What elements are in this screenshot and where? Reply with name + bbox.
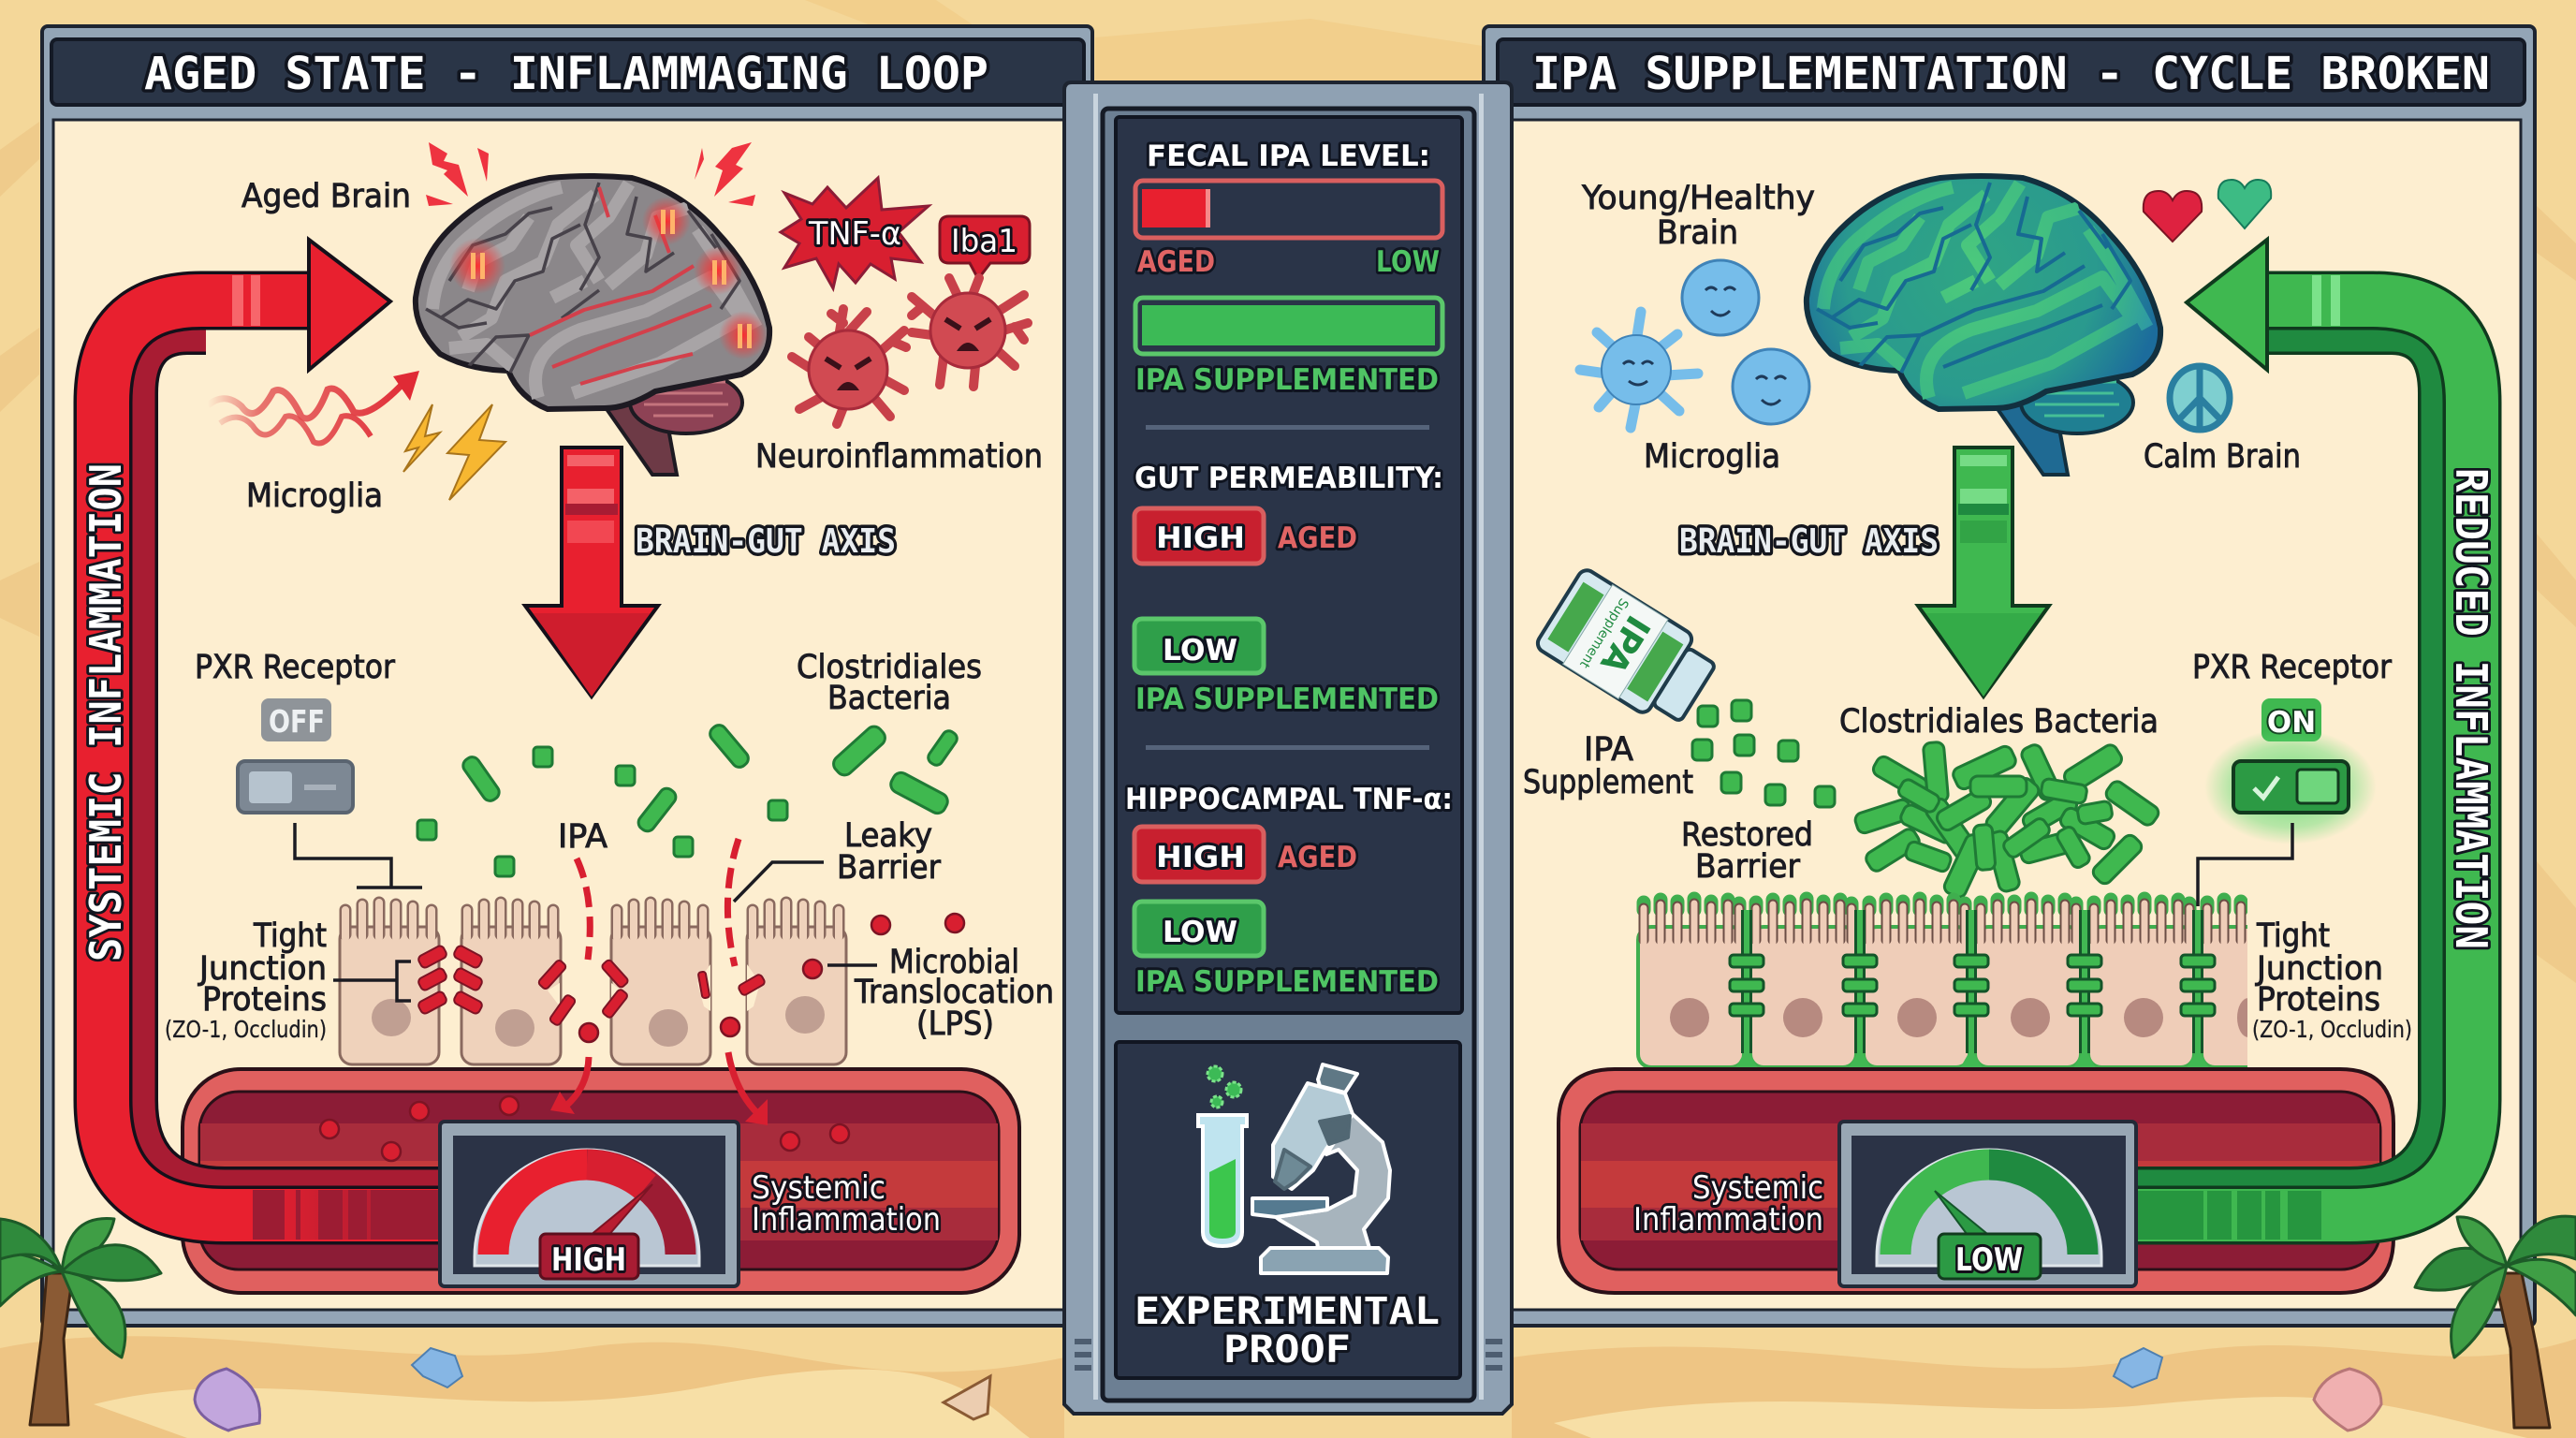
icon: IPA supplement bottle: Supplement	[1576, 595, 1632, 671]
label: experimental proof: EXPERIMENTAL	[1134, 1290, 1440, 1333]
green bacteria and IPA molecules	[417, 722, 959, 876]
systemic inflammation loop arrow	[80, 240, 449, 1240]
arrow: brain-gut axis down, red	[525, 448, 658, 697]
callout: TNF-alpha burst	[781, 178, 929, 288]
metric: fecal IPA level: FECAL IPA LEVEL:	[1147, 139, 1430, 173]
label: brain-gut axis, healthy: BRAIN-GUT AXIS	[1679, 522, 1939, 561]
label: microbial translocation	[827, 944, 1054, 1043]
heading: supplementation: IPA SUPPLEMENTATION - CYCLE BROKEN	[1532, 48, 2490, 100]
icon: angry microglia 1	[792, 309, 906, 424]
heading: aged state	[51, 39, 1084, 105]
metric: gut permeability	[1134, 462, 1443, 716]
label: systemic inflammation, aged vessel: Systemic	[752, 1169, 886, 1207]
icon: hearts	[2144, 180, 2271, 242]
icon: switch on	[2204, 728, 2377, 844]
icon: palm tree left	[0, 1219, 161, 1425]
icon: red spark bursts	[426, 142, 755, 206]
label: clostridiales bacteria	[797, 649, 982, 717]
label: tight junction proteins, healthy: Junction	[2255, 950, 2383, 988]
callout: Iba1 bubble	[940, 216, 1030, 279]
icon: bacteria cluster	[1853, 741, 2161, 900]
label: systemic inflammation, aged vessel	[752, 1169, 941, 1239]
arrows: leak into bloodstream	[550, 1052, 768, 1125]
metric: gut permeability: IPA SUPPLEMENTED	[1135, 682, 1439, 716]
panel: metrics	[1116, 117, 1462, 1013]
icon: IPA supplement bottle: IPA	[1592, 609, 1657, 680]
metric: fecal IPA level: AGED	[1137, 245, 1215, 279]
label: leaky barrier: Leaky	[844, 817, 932, 855]
metric: hippocampal TNF-alpha: HIGH	[1156, 841, 1245, 874]
label: tight junction proteins, healthy: Tight	[2256, 917, 2330, 955]
label: IPA supplement: Supplement	[1523, 764, 1693, 801]
panel: experimental proof	[1116, 1042, 1460, 1378]
label: tight junction proteins	[165, 917, 411, 1043]
label: systemic inflammation, healthy vessel	[1633, 1169, 1823, 1239]
label: tight junction proteins: (ZO-1, Occludin)	[165, 1016, 327, 1043]
gauge: high inflammation	[440, 1122, 739, 1286]
icon: microglia signal squiggle	[208, 371, 419, 443]
badge: off: OFF	[269, 703, 325, 740]
metric: hippocampal TNF-alpha: IPA SUPPLEMENTED	[1135, 965, 1439, 999]
icon: lightning bolts	[403, 404, 505, 500]
label: systemic inflammation, healthy vessel: Systemic	[1692, 1169, 1823, 1207]
metric: fecal IPA level: LOW	[1376, 245, 1440, 279]
callout: Iba1 bubble: Iba1	[951, 223, 1017, 260]
label: aged brain: Aged Brain	[242, 178, 411, 215]
activation line: pxr to barrier	[2198, 823, 2292, 906]
label: pxr receptor, healthy: PXR Receptor	[2192, 649, 2393, 686]
icon: palm tree right	[2415, 1216, 2576, 1428]
panel background: aged state	[53, 120, 1066, 1310]
panel: center frame	[1064, 82, 1512, 1414]
label: leaky barrier: Barrier	[837, 849, 942, 887]
gauge: low inflammation	[1839, 1122, 2136, 1286]
LPS translocating dots	[320, 914, 964, 1161]
icon: blue stone right	[2114, 1348, 2162, 1387]
label: clostridiales bacteria, healthy: Clostridiales Bacteria	[1839, 703, 2159, 741]
tight junction proteins: damaged	[417, 945, 766, 1026]
icon: purple shell	[195, 1369, 260, 1431]
inhibit line: pxr to barrier	[295, 823, 422, 888]
icon: angry microglia 2	[912, 278, 1028, 387]
label: pxr receptor: PXR Receptor	[195, 649, 396, 686]
blood vessel: aged	[183, 1069, 1019, 1293]
panel background: supplementation	[1510, 120, 2521, 1310]
label: young healthy brain: Brain	[1657, 214, 1738, 252]
label: systemic inflammation: SYSTEMIC INFLAMMATION	[80, 463, 131, 961]
label: experimental proof: PROOF	[1223, 1328, 1351, 1372]
arrow: brain-gut axis down, green	[1918, 448, 2049, 697]
icon: aged brain	[416, 176, 769, 475]
metric: gut permeability: LOW	[1163, 634, 1237, 668]
icon: test tube	[1198, 1066, 1247, 1246]
label: microbial translocation: Microbial	[889, 944, 1019, 981]
label: clostridiales bacteria: Clostridiales	[797, 649, 982, 686]
icon: peace sign	[2170, 366, 2230, 430]
intestinal cells: restored barrier	[1638, 899, 2307, 1073]
tight junction proteins: sealed	[1730, 910, 2215, 1073]
label: young healthy brain: Young/Healthy	[1581, 180, 1815, 217]
label: IPA: IPA	[558, 818, 607, 856]
IPA molecule pellets	[1692, 700, 1835, 807]
label: neuroinflammation: Neuroinflammation	[755, 438, 1043, 476]
label: microglia: Microglia	[246, 477, 383, 515]
icon: healthy brain	[1807, 176, 2160, 475]
label: systemic inflammation, aged vessel: Inflammation	[752, 1201, 941, 1239]
label: IPA supplement: IPA	[1584, 731, 1633, 769]
metric: hippocampal TNF-alpha: HIPPOCAMPAL TNF-α:	[1125, 783, 1453, 816]
vents	[1075, 1339, 1502, 1371]
label: clostridiales bacteria: Bacteria	[827, 680, 951, 717]
label: tight junction proteins, healthy	[2252, 917, 2412, 1043]
metric: fecal IPA level: IPA SUPPLEMENTED	[1135, 363, 1439, 397]
label: restored barrier: Barrier	[1695, 848, 1801, 886]
label: microbial translocation: (LPS)	[916, 1005, 994, 1043]
label: microbial translocation: Translocation	[854, 974, 1054, 1011]
icon: switch off	[238, 761, 353, 813]
metric: hippocampal TNF-alpha: AGED	[1278, 841, 1357, 874]
gauge: low inflammation: LOW	[1955, 1241, 2023, 1279]
leak paths: dashed red	[577, 839, 739, 966]
callout: TNF-alpha burst: TNF-α	[808, 215, 901, 253]
label: microglia, healthy: Microglia	[1644, 438, 1780, 476]
label: tight junction proteins: Proteins	[202, 981, 327, 1019]
metric: fecal IPA level	[1135, 139, 1442, 397]
icon: small brown shell	[944, 1376, 990, 1419]
label: tight junction proteins, healthy: Proteins	[2257, 981, 2380, 1019]
icon: blue stone left	[412, 1348, 462, 1387]
icon: microscope	[1252, 1064, 1390, 1273]
label: IPA supplement	[1523, 731, 1693, 801]
panel: aged state frame	[42, 26, 1092, 1326]
label: young healthy brain	[1581, 180, 1815, 252]
icon: happy microglia cells	[1580, 260, 1809, 428]
label: tight junction proteins: Tight	[253, 917, 327, 955]
reduced inflammation loop arrow	[2134, 240, 2496, 1240]
badge: on	[2261, 698, 2321, 741]
label: calm brain: Calm Brain	[2144, 438, 2301, 476]
gauge: high inflammation: HIGH	[551, 1241, 626, 1279]
label: brain-gut axis: BRAIN-GUT AXIS	[636, 522, 896, 561]
arrow head	[2187, 240, 2267, 370]
label: tight junction proteins, healthy: (ZO-1, Occludin)	[2252, 1016, 2412, 1043]
heading: aged state: AGED STATE - INFLAMMAGING LOOP	[144, 48, 988, 100]
label: tight junction proteins: Junction	[198, 950, 327, 988]
arrow head	[309, 240, 390, 370]
label: systemic inflammation, healthy vessel: Inflammation	[1633, 1201, 1823, 1239]
icon: pink shell	[2314, 1369, 2381, 1431]
label: restored barrier	[1681, 816, 1813, 886]
panel: supplementation frame	[1484, 26, 2535, 1326]
metric: hippocampal TNF-alpha	[1125, 783, 1453, 999]
intestinal cells: aged barrier	[340, 902, 846, 1064]
metric: hippocampal TNF-alpha: LOW	[1163, 916, 1237, 949]
label: experimental proof	[1134, 1290, 1440, 1372]
blood vessel: healthy	[1559, 1069, 2393, 1293]
metric: gut permeability: AGED	[1278, 521, 1357, 555]
label: reduced inflammation: REDUCED INFLAMMATION	[2446, 468, 2496, 949]
label: restored barrier: Restored	[1681, 816, 1813, 854]
icon: IPA supplement bottle	[1534, 567, 1723, 733]
metric: gut permeability: GUT PERMEABILITY:	[1134, 462, 1443, 495]
metric: gut permeability: HIGH	[1156, 521, 1245, 555]
label: leaky barrier	[734, 817, 942, 902]
badge: on: ON	[2267, 706, 2316, 740]
